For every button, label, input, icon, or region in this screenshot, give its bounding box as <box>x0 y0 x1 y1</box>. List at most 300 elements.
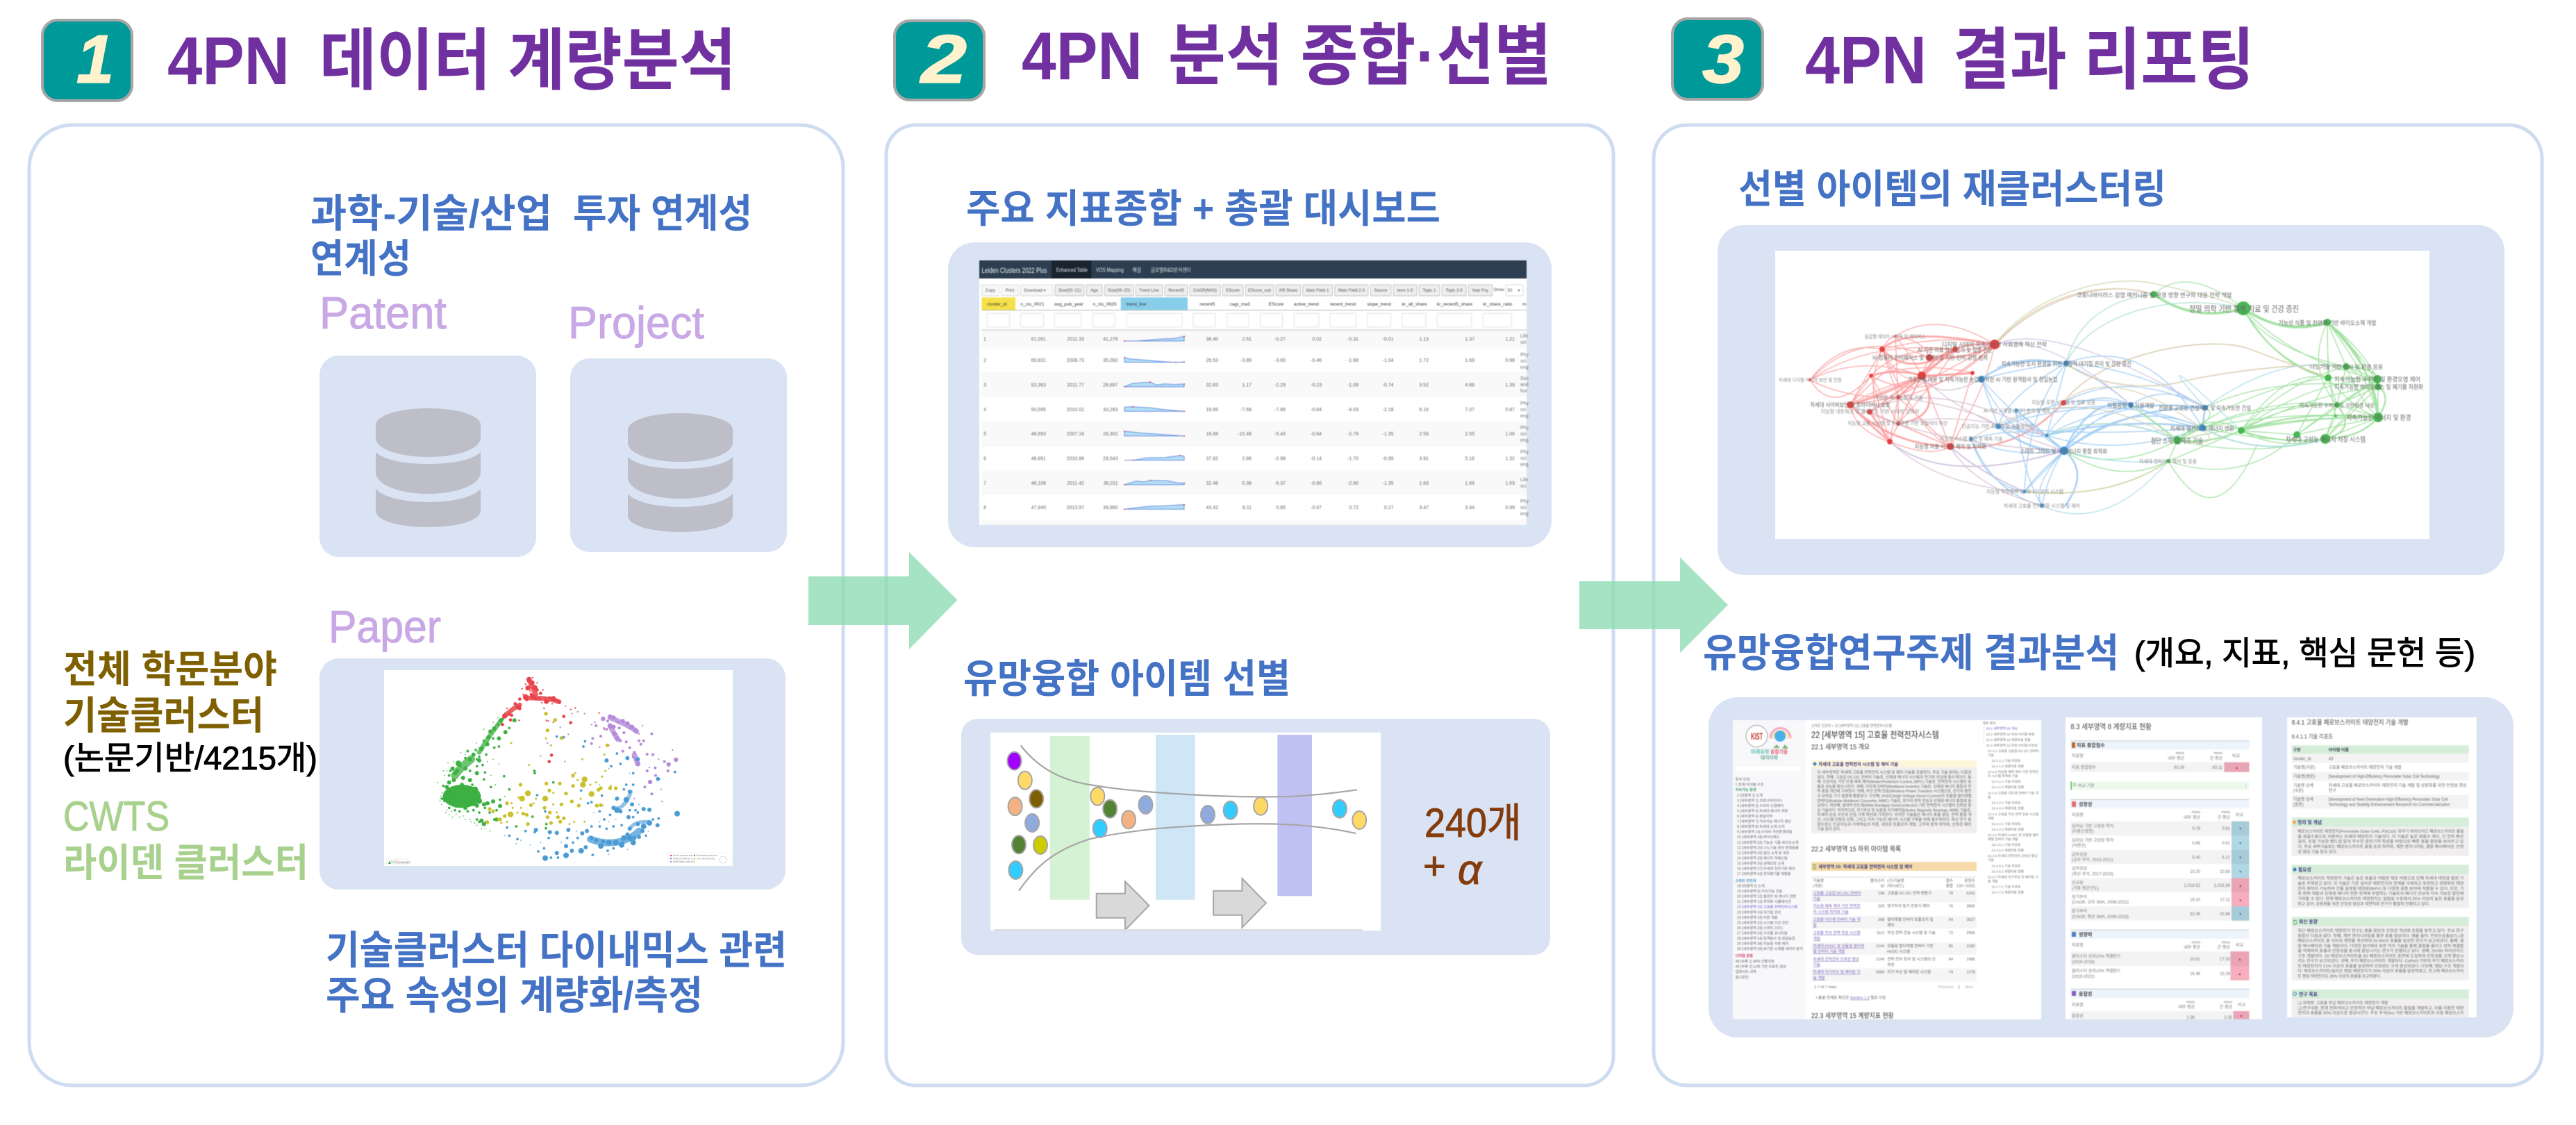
section: definition: 다. 주요 세부기술로는 페로브스카이트 물질 조성 최적화, 계면 엔지니어링, 결함 패시베이션, 안정 <box>2297 844 2463 849</box>
metric rows: 15.28 <box>2220 972 2231 976</box>
VOSviewer logo mark <box>387 859 410 865</box>
section: necessity: 후 변화 대응과 신재생 에너지 전환 정책에 부합하는 기술로서 에너지 안보와 지속 가능한 발전에 <box>2297 891 2463 897</box>
dashboard table rows: -0.14 <box>1311 457 1322 461</box>
dashboard table rows: 2.55 <box>1465 432 1474 437</box>
page 1 sub-item table: (국문) <box>1813 883 1823 889</box>
label: all-field technology clusters: (논문기반/4215개) <box>63 740 317 776</box>
page 1 sub-item table: 자기 부상 및 베어링 시스템 <box>1887 969 1931 975</box>
selection funnel card <box>961 719 1550 955</box>
dashboard table header: m <box>1522 302 1527 307</box>
network labels: 차세대 열관리 및 에너지 변환 <box>2170 425 2234 432</box>
dashboard table rows: -0.60 <box>1311 481 1322 486</box>
heading: science-technology linkage: 투자 연계성 <box>573 192 752 236</box>
dashboard toolbar buttons: Main Field 2-3 <box>1338 289 1365 293</box>
network edges: blue strong links <box>1981 361 2205 507</box>
dashboard toolbar buttons: EScore_sub <box>1248 289 1272 293</box>
network labels: 지능형 네트워크 및 클라우드 기반 스마트 인프라 <box>1821 408 1920 415</box>
page 1 sub-item table: 72 <box>1949 931 1953 935</box>
metric rows: 장기추이 <box>2072 894 2087 900</box>
page 1 sub-item table: 차세대 자기부상 및 베어링 기 <box>1813 969 1860 975</box>
page 1 table of contents: 22.2 세부영역 15 하위 아이템 목록 <box>1986 732 2035 737</box>
section: latest trends: 구조 개발이다. 2D 페로브스카이트를 3D 페로브스카이트 표면에 도입하여 안정성을 크게 향상시 <box>2297 953 2463 958</box>
page 1 sub-item table: 자 시스템 최적화 기술 <box>1813 909 1848 915</box>
metric rows: ▼ <box>2238 842 2242 846</box>
metric rows: 비교 <box>2238 1002 2246 1008</box>
page 1 sub-item table: 종합 <box>1946 883 1953 889</box>
sidebar navigation: 16 [세부영역 37] 차세대 전자기파 제어 <box>1737 866 1795 872</box>
dashboard toolbar buttons: ▾ <box>1518 289 1520 293</box>
network labels: 지속가능한 바이오매스 및 폐기물 자원화 <box>2334 383 2423 390</box>
dashboard screenshot: VOS Mapping <box>1096 267 1124 274</box>
arrow: filter step 2 <box>1213 878 1266 928</box>
metric rows: ▲ <box>2240 1014 2243 1018</box>
dashboard table header: cluster_id <box>987 302 1007 307</box>
logo: 미래유망 <box>1751 748 1770 755</box>
sidebar navigation: 5 [세부영역 3] 차세대 에너지 저장 <box>1737 808 1788 813</box>
page 1 table of contents: 개발 <box>1988 816 1994 821</box>
page 1 sub-item table: 전력 전자 장치 및 시스템의 신 <box>1887 956 1936 962</box>
section: latest trends: 함 패시베이션 기술 개발이다. 다양한 첨가제와 표면 처리 기술을 통해 결함을 줄이고 전하 재결합 <box>2297 943 2463 949</box>
report page 2: metrics: 융합성 <box>2079 990 2092 997</box>
page 1 headings <box>1811 723 1939 1020</box>
dashboard table rows: Phy <box>1520 353 1529 358</box>
dashboard table rows: 1.03 <box>1505 481 1515 486</box>
dashboard table rows: -2.79 <box>1347 432 1358 437</box>
page 1 table of contents: 22.4.7 차세대 자기부상 및 베어링 기 <box>1988 875 2038 879</box>
item summary table: cluster_id <box>2293 757 2311 761</box>
dashboard table rows: 1.72 <box>1419 358 1429 363</box>
dashboard toolbar buttons: Copy <box>986 289 995 293</box>
dashboard table rows: Life <box>1520 478 1528 483</box>
item summary table: 아이템 이름 <box>2329 747 2349 753</box>
item summary table: 43 <box>2329 757 2334 761</box>
paper cluster card <box>319 658 786 890</box>
metric rows: 5.40 <box>2192 856 2201 860</box>
result count: 240 + alpha <box>1423 801 1522 893</box>
chart legend <box>668 853 732 866</box>
page 1 table of contents: 22.4.3.1 기술 리포트 <box>1992 800 2021 806</box>
page 1 sub-item table: 차세대 HVDC 및 모듈형 멀티레 <box>1813 943 1864 949</box>
metric rows: 6.21 <box>2222 856 2231 860</box>
item summary table: Technology and Stability Enhancement Research for Commercialization <box>2329 803 2450 807</box>
dashboard table rows: 4 <box>983 408 986 412</box>
dashboard table rows: -7.88 <box>1274 408 1286 412</box>
page 1 sub-item table: 세부영역 15: 차세대 고효율 전력전자 시스템 및 제어 <box>1818 863 1912 869</box>
metric rows: 지표명 <box>2072 1002 2084 1008</box>
dashboard toolbar buttons: Topic 2-5 <box>1445 289 1463 293</box>
diagram: funnel filtering <box>990 733 1381 931</box>
page 1 sub-item table: 벨 컨버터 기술 개발 <box>1813 949 1845 954</box>
network labels: 지능형 자율 시스템 제어 및 최적화 <box>1915 443 1986 450</box>
step 2 badge: 2 <box>920 21 967 97</box>
metric rows: ▼ <box>2238 827 2242 831</box>
page 1 sub-item table: 85 <box>1949 944 1953 949</box>
dashboard table rows: -3.89 <box>1240 358 1252 363</box>
metric rows: 17.33 <box>2220 958 2231 962</box>
page 1 overview callout: 같다. 첫째, 고승압 DC-DC 컨버터 기술로, 신재생 에너지 시스템과 전기차 산업에 필수적이다. 둘 <box>1817 774 1971 780</box>
dashboard toolbar buttons: term 1-5 <box>1397 289 1413 293</box>
dashboard toolbar buttons: Source <box>1374 289 1388 293</box>
metric rows: 비교 <box>2236 942 2244 948</box>
section headers <box>2070 741 2249 998</box>
page 1 sub-item table: 발 <box>1813 922 1817 928</box>
section: necessity: 하고 있어, 상용화를 위한 안정성 향상과 대면적화 연구가 활발히 진행되고 있다. <box>2297 901 2429 906</box>
dashboard table header: EScore <box>1269 302 1284 307</box>
section: latest trends: 최신 동향 <box>2299 918 2318 925</box>
page 1 table of contents: 발 <box>1988 794 1991 800</box>
metric rows: meso <box>2222 810 2230 815</box>
chart legend: Biomedical and heal... <box>697 854 718 857</box>
page 1 sub-item table: 398 <box>1878 918 1884 922</box>
page 1 sub-item table: 1278 <box>1966 971 1975 975</box>
page 1 table of contents: 22.4.1 고효율 고승압 DC-DC 컨버터 <box>1988 749 2039 753</box>
heading: convergence topic analysis: 유망융합연구주제 결과분석 <box>1703 631 2119 676</box>
network labels: 지능형 교통 시스템 및 자율주행 기반 모빌리티 혁신 <box>1847 419 1947 426</box>
label: Patent: Patent <box>319 288 447 338</box>
caption: cluster dynamics measurement: 주요 속성의 계량화/측정 <box>326 974 703 1018</box>
section: research goals: ❑ 과제명: 고효율 무납 페로브스카이트 태양전지 개발 <box>2297 1000 2388 1006</box>
dashboard table rows: -1.04 <box>1383 358 1394 363</box>
dashboard table rows: -2.18 <box>1383 408 1394 412</box>
dashboard table rows: 32.83 <box>1206 383 1218 388</box>
dashboard table rows: 2013.97 <box>1067 506 1084 510</box>
dashboard table rows: -0.23 <box>1311 383 1322 388</box>
project database card <box>570 358 787 552</box>
network edges: cross-cluster links <box>1850 281 2346 514</box>
dashboard table header: n_clu_0021 <box>1020 302 1045 307</box>
sidebar navigation: 6 [세부영역 4] 정밀의학 <box>1737 813 1772 819</box>
dashboard screenshot: Enhanced Table <box>1056 267 1088 274</box>
chart legend: Social sciences and... <box>673 854 695 857</box>
dashboard table rows: 38.40 <box>1206 338 1218 342</box>
arrow: step 2 to step 3 <box>1579 557 1728 653</box>
page 1 sub-item table: 94 <box>1949 918 1953 922</box>
section: definition: 성 향상 기술 등이 있다. <box>2297 849 2337 854</box>
dashboard screenshot: Leiden Clusters 2022 Plus <box>982 267 1047 275</box>
dashboard toolbar buttons: Main Field 1 <box>1306 289 1329 293</box>
heading: science-technology linkage: 연계성 <box>310 237 411 281</box>
page 1 table of contents: 기술 <box>1988 858 1994 862</box>
page 1 overview callout: 율과 성능을 향상시킨다. 셋째, 다단계 인버터(Multilevel Inverter) 기술로, 신재생 에너지 통합과 전 <box>1817 783 1971 789</box>
dashboard table rows: 0.02 <box>1312 338 1322 342</box>
section: latest trends: 트 탠덤 태양전지도 26% 이상의 효율을 보고하였다. <box>2297 973 2381 978</box>
dashboard table rows: 26.53 <box>1206 358 1218 363</box>
dashboard table rows: sci <box>1520 340 1527 345</box>
dashboard table header: kr_all_share <box>1402 302 1427 307</box>
page 1 table of contents: 22.1 세부영역 15 개요 <box>1986 726 2018 731</box>
dashboard table rows: and <box>1520 383 1529 388</box>
label: CWTS Leiden clusters: 라이덴 클러스터 <box>63 841 308 885</box>
report page 3: technology report: 8.4.1 고효율 페로브스카이트 태양전지 기술 개발 <box>2292 719 2409 726</box>
dense cluster bases <box>443 679 648 843</box>
page 1 sub-item table: 74 <box>1949 971 1953 975</box>
dashboard table header: active_trend <box>1294 302 1319 307</box>
metric rows: 83.11 <box>2212 766 2223 770</box>
report page 1: overview <box>1733 720 2041 1020</box>
page 1 sub-item table: 지능형 예측 제어 기반 전력전 <box>1813 903 1860 909</box>
metric rows: 비교 <box>2232 753 2241 758</box>
page 1 table of contents: 기술 <box>1988 753 1994 758</box>
metric rows: 20.81 <box>2190 958 2201 962</box>
dashboard table rows: 1.37 <box>1465 338 1474 342</box>
dashboard table rows: 3.91 <box>1419 457 1429 461</box>
network edges: red cluster <box>1810 324 1995 451</box>
sidebar navigation: 2 [대영역 1] 소개 <box>1737 792 1763 798</box>
page 1 table of contents: 22.4.6.2 계량지표 현황 <box>1992 869 2025 874</box>
dashboard table header: recent5 <box>1199 302 1215 307</box>
dashboard toolbar buttons: Trend Line <box>1139 289 1159 293</box>
sidebar navigation: 지속가능 환경 <box>1736 787 1756 792</box>
dashboard table rows: 61,091 <box>1031 338 1046 342</box>
section: research goals: 연구 목표 <box>2299 991 2318 997</box>
item summary table: 기술명(국문) <box>2293 765 2315 770</box>
sidebar navigation: 11 [세부영역 23] 기능성 식품·바이오소재 <box>1737 840 1799 845</box>
metric rows: 지표명 <box>2072 812 2084 818</box>
dashboard table rows: 39,960 <box>1103 506 1118 510</box>
metric rows: 융합성 <box>2072 1013 2084 1019</box>
step 2 badge <box>895 21 984 100</box>
label: Project: Project <box>568 297 704 348</box>
dashboard toolbar buttons: 50 <box>1508 289 1513 293</box>
dashboard table rows: 48,993 <box>1031 432 1046 437</box>
dashboard table header <box>982 297 1527 310</box>
page 1 table of contents: 22.4.5.1 기술 리포트 <box>1992 842 2021 847</box>
metric rows: 0.91 <box>2222 842 2231 846</box>
step 1 badge: 1 <box>76 21 114 97</box>
metric rows: (2016-2018) <box>2072 960 2095 965</box>
step 1 title: 데이터 계량분석 <box>319 23 736 99</box>
dashboard table rows: -1.35 <box>1383 432 1394 437</box>
metric rows: ▼ <box>2238 870 2242 874</box>
page 1 table of contents: 22.4.4.2 계량지표 현황 <box>1992 827 2025 832</box>
dashboard toolbar buttons: Topic 1 <box>1422 289 1436 293</box>
logo: KIST <box>1751 731 1763 742</box>
dashboard table rows: 36,011 <box>1104 481 1118 486</box>
dashboard toolbar buttons: Age <box>1090 289 1099 293</box>
dashboard table rows: -0.27 <box>1274 338 1286 342</box>
sidebar navigation: 10 [세부영역 18] 바이오매스 <box>1737 834 1780 840</box>
network edges: green strong links <box>2154 294 2385 441</box>
metric rows: 17.11 <box>2220 899 2231 903</box>
network labels: 지능형 계산형 인지 기술 <box>1875 394 1923 401</box>
page 1 overview callout: 요하다. 여섯째, 광대역 반도체(Wide Bandgap Semiconductor) 기반 전력전자 시스템의 신뢰성 향 <box>1817 803 1971 808</box>
dashboard screenshot: 해설 <box>1132 267 1141 274</box>
network labels: 지능형 차량동력 및 에너지 관리 시스템 <box>1986 488 2063 494</box>
metric rows: (가중 평균년도) <box>2072 885 2099 891</box>
dashboard table rows: 2010.88 <box>1067 457 1084 461</box>
step 1 badge <box>42 20 132 101</box>
dashboard toolbar buttons: Year Frq. <box>1472 289 1489 293</box>
dashboard toolbar buttons: Show <box>1493 288 1504 292</box>
network labels: 스마트 그리드 및 재생에너지 통합 최적화 <box>2020 448 2107 455</box>
dashboard table rows: 0.87 <box>1505 408 1515 412</box>
chart legend: Physical sciences a... <box>673 857 695 860</box>
network edges: green cluster <box>2064 282 2378 498</box>
section: definition: 페로브스카이트 태양전지(Perovskite Solar Cells, PSCs)는 유무기 하이브리드 페로브스카이트 물질 <box>2297 828 2463 834</box>
dashboard table rows: 5 <box>983 432 986 437</box>
dashboard table rows: -1.35 <box>1383 481 1394 486</box>
dashboard table rows: 2 <box>983 358 986 363</box>
item summary table: 차세대 고효율 페로브스카이트 태양전지 기술 개발 및 상용화를 위한 안정성 향상 <box>2329 783 2467 788</box>
dashboard table rows: sci <box>1520 408 1527 412</box>
page 1 table of contents: 22.4.7.2 계량지표 현황 <box>1992 890 2025 894</box>
metric rows: 10.83 <box>2220 870 2231 874</box>
page 1 sub-item table: 2956 <box>1966 931 1975 935</box>
heading: science-technology linkage <box>310 192 752 281</box>
metric rows: meso <box>2176 751 2184 756</box>
dashboard table rows: 2008.73 <box>1067 358 1084 363</box>
metric rows: 간 평균 <box>2220 1004 2232 1010</box>
dashboard table rows: 2011.42 <box>1067 481 1084 486</box>
dashboard trend sparklines <box>1124 336 1184 509</box>
dashboard table rows: -10.49 <box>1238 432 1252 437</box>
section: research goals: 전지의 효율을 20% 이상으로 향상시킨다. 주로 주석(Sn) 기반 페로브스카이트와 이중 페로브스카 <box>2297 1010 2463 1016</box>
step 3 badge <box>1672 19 1763 99</box>
sidebar navigation: 28 [세부영역 34] 원격탐사 및 정밀농업 <box>1737 935 1795 941</box>
metric rows: 32.36 <box>2190 912 2201 917</box>
dashboard table rows: sci <box>1520 432 1527 437</box>
dashboard table rows: 1.69 <box>1465 358 1474 363</box>
metric rows: ▲ <box>2238 972 2241 976</box>
page 1 overview callout: 상 기술이다. 마지막으로, 자기부상 및 능동형 자기베어링(Active Magnetic Bearings, AMB) 기술로, <box>1817 807 1972 812</box>
dashboard table rows: 0.85 <box>1276 506 1286 510</box>
report page 2: metrics: 영향력 <box>2079 931 2092 938</box>
result count: 240 + alpha: + <box>1423 844 1446 888</box>
label: all-field technology clusters: 전체 학문분야 <box>63 648 277 691</box>
metric rows: 16.36 <box>2190 972 2201 976</box>
page 1 headings: 22.1 세부영역 15 개요 <box>1811 743 1870 751</box>
chart: item network map <box>1779 281 2423 514</box>
page 1 sub-item table: 3527 <box>1966 918 1975 922</box>
metric rows: 내부 평균 <box>2184 944 2200 950</box>
metric rows: meso <box>2192 810 2200 815</box>
dashboard table header: trend_line <box>1127 302 1147 307</box>
metric rows: (확산 주어, 2017-2023) <box>2072 871 2113 876</box>
page 1 overview callout: 력 품질 개선에 기여한다. 넷째, 무선 전력 전송(Wireless Power Transfer) 시스템으로, 전기차 충전 <box>1817 788 1971 794</box>
network labels: 지속가능한 수처리 및 극한환경 대응 <box>2300 401 2375 408</box>
report page 2: metrics: 성장성 <box>2079 801 2092 807</box>
page 1 sub-item table: 84 <box>1949 958 1953 962</box>
dashboard table rows: 35,082 <box>1103 358 1118 363</box>
metric rows: 내부 평균 <box>2168 756 2184 761</box>
dashboard table rows: 2011.33 <box>1067 338 1084 342</box>
metric rows: meso <box>2186 1000 2195 1004</box>
step 3 title: 결과 리포팅 <box>1953 22 2254 98</box>
section: definition <box>2292 817 2469 856</box>
network labels: 실감형 데이터 시각화 및 메타버스 <box>1864 333 1925 340</box>
dashboard table rows: -0.31 <box>1347 338 1358 342</box>
item summary table: Development of Next-Generation High-Efficiency Perovskite Solar Cell <box>2329 798 2448 802</box>
dashboard table rows: 47,940 <box>1031 506 1046 510</box>
page 1 sub-item table: 뢰성 <box>1887 962 1894 967</box>
dashboard toolbar buttons: Size(00~21) <box>1058 289 1081 293</box>
item summary table: 연구 <box>2329 788 2336 793</box>
page 1 headings: 스마트 인프라 » 22 [세부영역 15] 고효율 전력전자시스템 <box>1811 723 1892 728</box>
heading: convergence topic analysis <box>1703 631 2475 676</box>
section: latest trends: 키는 연구가 보고되었다. 넷째, 무기 페로브스카이트 개발이다. CsPbI3 기반의 무기 페로브스카이 <box>2297 958 2463 964</box>
icon: patent database <box>376 408 481 527</box>
dashboard table rows: -0.64 <box>1311 432 1322 437</box>
page 1 table of contents: 레벨 컨버터 기술 개발 <box>1988 837 2018 842</box>
page 1 overview callout: 차세대 고효율 전력전자 시스템 및 제어 기술 <box>1818 761 1898 767</box>
dashboard table header: kr_recent5_share <box>1437 302 1472 307</box>
section: necessity: 술로 주목받고 있다. 이 기술은 기존 실리콘 태양전지의 한계를 극복하고 유연하고 경량화된 태양 <box>2297 881 2463 886</box>
page 1 sub-item table: 고효율 무선 전력 전송 시스템 <box>1813 930 1860 935</box>
dashboard table rows: 3 <box>983 383 986 388</box>
section: latest trends: 트 태양전지가 21% 이상의 효율을 달성하며 안정성도 크게 향상되었다. 다섯째, 탠덤 구조 개발이 <box>2297 963 2463 969</box>
dashboard table rows: hur <box>1520 389 1528 394</box>
section: necessity: 페로브스카이트 태양전지 기술은 높은 효율과 저렴한 제조 비용으로 인해 차세대 태양광 발전 기 <box>2297 876 2463 881</box>
page 1 sub-item table: 2050 <box>1876 971 1884 975</box>
network labels: AI 기반 의료 영상 분석 및 질병 진단 <box>1918 347 1993 353</box>
page 1 table of contents: 22.4.5 차세대 HVDC 및 모듈형 멀티 <box>1988 833 2038 838</box>
dashboard filter inputs <box>987 313 1511 327</box>
sidebar navigation: 49 [부록 2] LLM 기반 리포트 생성 <box>1736 964 1786 969</box>
network labels: 기후변화 대응 및 지속가능한 농업을 위한 AI 기반 원격탐사 및 정밀농업 <box>1908 376 2057 383</box>
heading: re-clustering: 선별 아이템의 재클러스터링 <box>1738 167 2166 212</box>
network labels: 지능형 로봇 시스템 및 의료 응용 <box>2031 399 2095 406</box>
dashboard table rows: 19.85 <box>1206 408 1218 412</box>
report page 2: metrics: 지표 종합점수 <box>2077 742 2105 749</box>
metric rows: 비교 기준 <box>2078 783 2095 789</box>
network labels: AI 기반 시계열 데이터 분석 및 예측 <box>1984 407 2050 414</box>
dashboard table rows: 2007.16 <box>1067 432 1084 437</box>
page 1 table of contents: 22.4.4 고효율 무선 전력 전송 시스템 <box>1988 812 2038 817</box>
metric rows: (다중신경망) <box>2072 828 2094 834</box>
report page 2: metrics: 8.3 세부영역 8 계량지표 현황 <box>2070 722 2152 731</box>
network labels: 지속가능한 도시 환경을 위한 통합적 대기질 관리 및 건강 증진 <box>2002 360 2132 367</box>
dashboard table rows: 0.72 <box>1349 506 1358 510</box>
dashboard table rows: 1.21 <box>1505 338 1515 342</box>
step 2 title: 분석 종합·선별 <box>1168 18 1552 94</box>
panel: step 2 synthesis and selection <box>886 18 1613 1085</box>
metric rows: 32.86 <box>2220 912 2231 917</box>
metric rows: 급부상성 <box>2072 851 2087 857</box>
dashboard table rows: -0.84 <box>1311 408 1322 412</box>
network labels: 인공지능 기반 최적화 및 시뮬레이션 <box>1961 422 2034 429</box>
page 1 sub-item table: 고효율 다단계 인버터 기술 개 <box>1813 917 1860 922</box>
item summary table: 기술명 상세 <box>2293 797 2313 802</box>
item summary table: 고효율 페로브스카이트 태양전지 기술 개발 <box>2329 765 2402 770</box>
step 2 title: 4PN <box>1022 18 1142 94</box>
dashboard table header: cagr_ma3 <box>1230 302 1250 307</box>
dashboard table rows: 1.63 <box>1419 481 1429 486</box>
page 1 sub-item table: 무선 전력 전송 시스템 및 기술 <box>1887 930 1936 935</box>
dashboard table rows: 0.38 <box>1242 481 1252 486</box>
dashboard table rows: Phy <box>1520 499 1529 504</box>
caption: cluster dynamics measurement: 기술클러스터 다이내믹스 관련 <box>326 928 787 973</box>
page 1 table of contents: 자 시스템 최적화 기술 <box>1988 774 2018 778</box>
dashboard screenshot <box>979 260 1529 525</box>
page 1 overview callout: 째, 인공지능 기반 모델 예측 제어(Model Predictive Control, MPC) 기술로, 전력전자 시스템의 효 <box>1817 779 1971 785</box>
dashboard toolbar buttons: KR Share <box>1279 289 1298 293</box>
chart: VOSviewer paper cluster map <box>438 678 677 858</box>
page 1 headings: 22.2 세부영역 15 하위 아이템 목록 <box>1811 844 1901 853</box>
page 1 sub-item table: 기술 <box>1813 962 1820 967</box>
dashboard toolbar buttons: Download ▾ <box>1024 289 1046 293</box>
dashboard table rows: Life <box>1520 334 1528 339</box>
dashboard table rows: 7.07 <box>1465 408 1474 412</box>
metric rows: 10.20 <box>2190 870 2201 874</box>
network labels: 지능형 시스템 평가 및 예측 기술 <box>1940 435 2003 442</box>
section: definition: 을 광흡수층으로 사용하는 차세대 태양전지 기술이다. 이 기술은 높은 광흡수 계수, 긴 전하 확산 <box>2297 833 2463 839</box>
dashboard table rows: 8.11 <box>1243 506 1252 510</box>
sidebar navigation: 3 [세부영역 1] 코로나바이러스 <box>1737 797 1783 803</box>
metric rows: 0.79 <box>2192 827 2201 831</box>
metric rows: ▼ <box>2238 912 2242 917</box>
page 1 overview callout: 차세대 운송 수단과 산업 기계 혁신에 기여한다. 이러한 기술들은 에너지 효율 향상, 전력 품질 개 <box>1817 812 1971 817</box>
dashboard table rows: -7.68 <box>1240 408 1252 412</box>
